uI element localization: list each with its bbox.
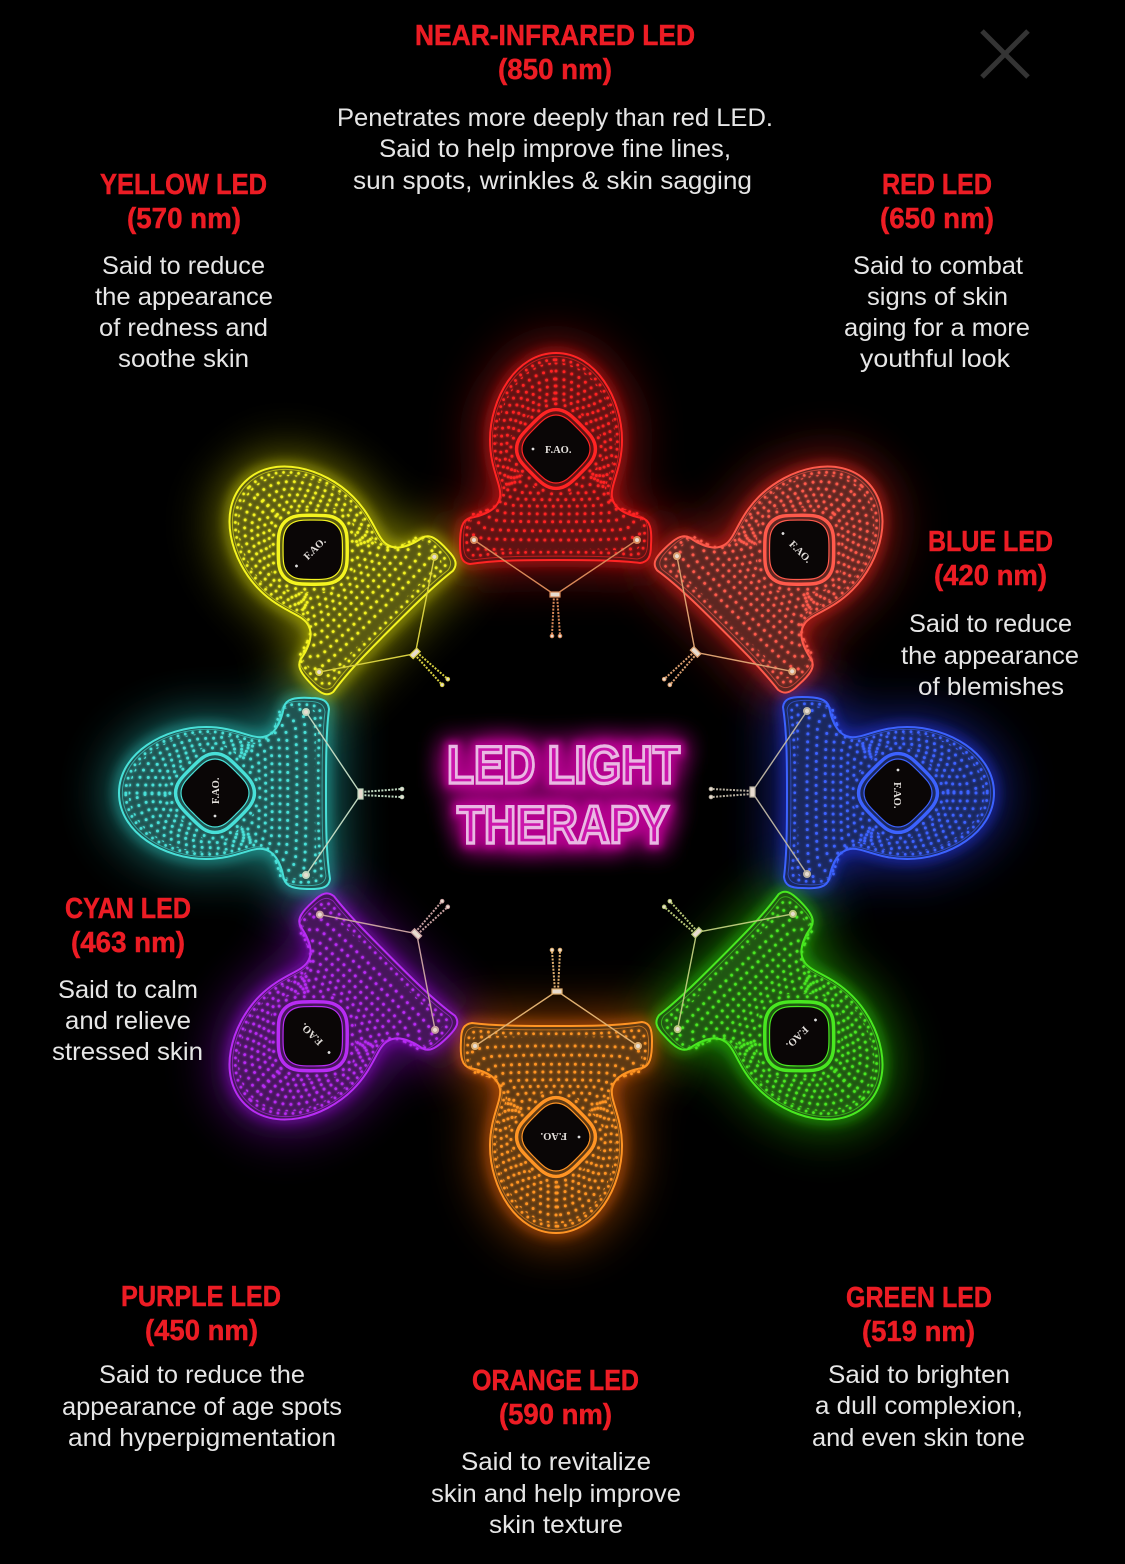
- label: purple LED: appearance of age spots: [62, 1393, 342, 1421]
- mask: coral red LED: F.AO.: [787, 539, 813, 566]
- label: orange LED: ORANGE LED: [472, 1365, 639, 1397]
- label: cyan LED: stressed skin: [52, 1038, 203, 1066]
- label: cyan LED: [52, 893, 203, 1066]
- label: near-infrared LED: Penetrates more deeply than red LED.: [337, 104, 773, 132]
- label: red LED: (650 nm): [880, 203, 994, 235]
- glow halos behind all masks: [119, 353, 994, 1233]
- label: near-infrared LED: sun spots, wrinkles & skin sagging: [353, 167, 752, 195]
- label: green LED: GREEN LED: [846, 1282, 992, 1314]
- mask: cyan LED: [119, 686, 404, 900]
- label: orange LED: (590 nm): [499, 1399, 612, 1431]
- label: yellow LED: of redness and: [99, 314, 268, 342]
- label: yellow LED: [95, 169, 273, 373]
- label: cyan LED: Said to calm: [58, 976, 198, 1004]
- mask: purple LED: F.AO.: [299, 1020, 325, 1047]
- label: purple LED: PURPLE LED: [121, 1281, 281, 1313]
- mask: green LED: [590, 827, 943, 1180]
- label: yellow LED: YELLOW LED: [100, 169, 267, 201]
- label: near-infrared LED: (850 nm): [498, 54, 612, 86]
- label: red LED: youthful look: [860, 345, 1011, 373]
- label: blue LED: of blemishes: [918, 673, 1064, 701]
- label: orange LED: skin texture: [489, 1511, 623, 1539]
- mask: orange LED: [449, 948, 663, 1233]
- label: purple LED: Said to reduce the: [99, 1361, 305, 1389]
- title: LED Light Therapy: [447, 736, 680, 855]
- label: yellow LED: the appearance: [95, 283, 273, 311]
- mask: cyan LED: F.AO.: [211, 777, 222, 804]
- label: yellow LED: soothe skin: [118, 345, 249, 373]
- title: LED Light Therapy: THERAPY: [457, 796, 669, 855]
- label: blue LED: BLUE LED: [928, 526, 1053, 558]
- label: green LED: a dull complexion,: [815, 1392, 1023, 1420]
- label: orange LED: [431, 1365, 681, 1539]
- label: blue LED: the appearance: [901, 642, 1079, 670]
- label: green LED: [812, 1282, 1025, 1452]
- mask: red LED: F.AO.: [545, 445, 572, 456]
- label: cyan LED: and relieve: [65, 1007, 191, 1035]
- label: orange LED: Said to revitalize: [461, 1448, 651, 1476]
- label: blue LED: (420 nm): [934, 560, 1047, 592]
- label: purple LED: and hyperpigmentation: [68, 1424, 336, 1452]
- label: blue LED: [901, 526, 1079, 701]
- mask: purple LED: [169, 827, 522, 1180]
- label: blue LED: Said to reduce: [909, 610, 1072, 638]
- label: purple LED: (450 nm): [145, 1315, 258, 1347]
- mask: coral red LED: [590, 406, 943, 759]
- label: green LED: and even skin tone: [812, 1424, 1025, 1452]
- label: near-infrared LED: [337, 20, 773, 195]
- title: LED Light Therapy: LED LIGHT: [447, 736, 680, 795]
- mask: orange LED: F.AO.: [540, 1130, 567, 1141]
- label: red LED: RED LED: [882, 169, 992, 201]
- mask: blue LED: F.AO.: [891, 782, 902, 809]
- mask: green LED: F.AO.: [783, 1024, 810, 1050]
- mask: yellow LED: F.AO.: [302, 536, 329, 562]
- label: green LED: Said to brighten: [828, 1361, 1010, 1389]
- label: yellow LED: Said to reduce: [102, 252, 265, 280]
- label: near-infrared LED: Said to help improve fine lines,: [379, 135, 731, 163]
- mask: yellow LED: [169, 406, 522, 759]
- label: green LED: (519 nm): [862, 1316, 975, 1348]
- label: purple LED: [62, 1281, 342, 1452]
- label: orange LED: skin and help improve: [431, 1480, 681, 1508]
- label: red LED: signs of skin: [867, 283, 1008, 311]
- label: red LED: Said to combat: [853, 252, 1023, 280]
- label: red LED: aging for a more: [844, 314, 1030, 342]
- label: cyan LED: (463 nm): [71, 927, 185, 959]
- label: near-infrared LED: NEAR-INFRARED LED: [415, 20, 695, 52]
- label: yellow LED: (570 nm): [127, 203, 241, 235]
- icon: close X: [982, 31, 1028, 77]
- mask: red LED: [449, 353, 663, 638]
- label: red LED: [844, 169, 1030, 373]
- label: cyan LED: CYAN LED: [65, 893, 191, 925]
- mask: blue LED: [709, 686, 994, 900]
